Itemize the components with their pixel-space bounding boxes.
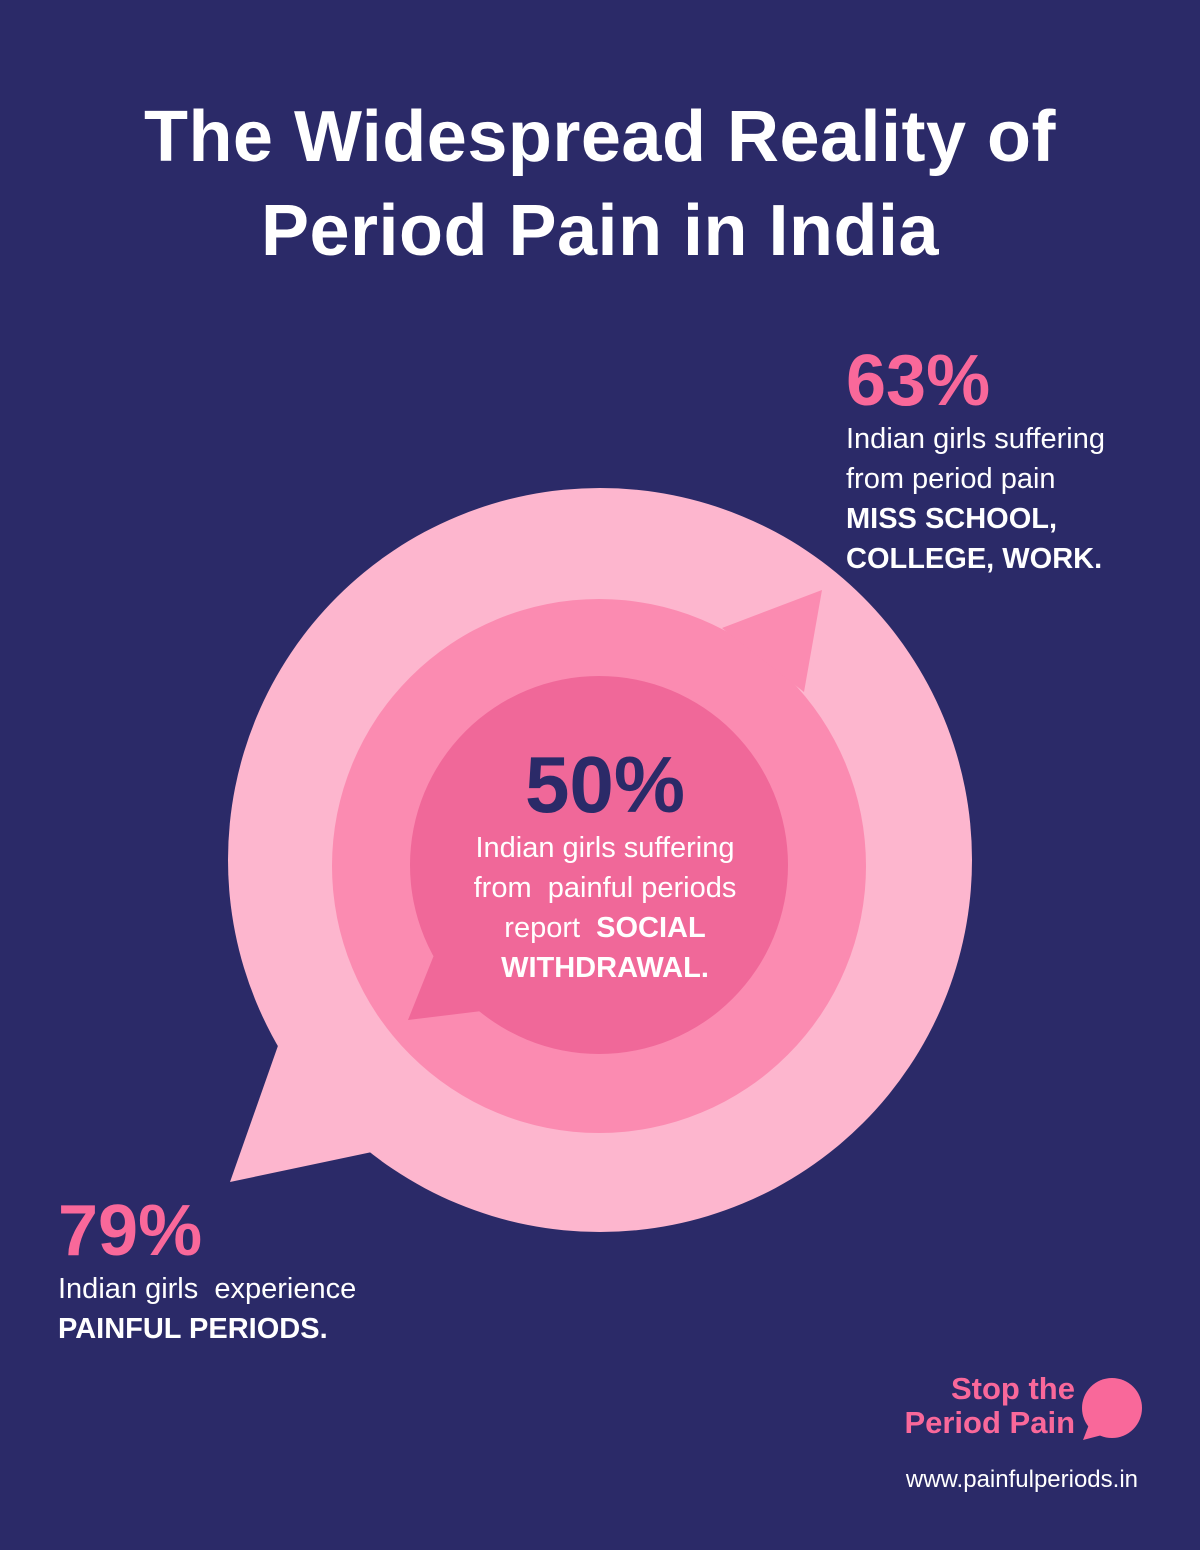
logo: Period Pain	[904, 1405, 1075, 1440]
title: The Widespread Reality of	[144, 97, 1056, 177]
center stat: from painful periods	[474, 872, 736, 904]
stat 79%	[58, 1191, 356, 1345]
middle bubble	[332, 590, 866, 1133]
icon: speech bubble	[1082, 1378, 1142, 1440]
logo: Stop the	[951, 1371, 1075, 1406]
center stat: 50%	[525, 740, 685, 829]
stat 79%: Indian girls experience	[58, 1273, 356, 1305]
title: Period Pain in India	[261, 191, 939, 271]
stat 79%: 79%	[58, 1191, 202, 1271]
stat 63%: MISS SCHOOL,	[846, 503, 1057, 535]
stat 63%: 63%	[846, 341, 990, 421]
stat 63%: COLLEGE, WORK.	[846, 543, 1102, 575]
stat 63%	[846, 341, 1105, 575]
center stat: report SOCIAL	[504, 912, 706, 944]
stat 63%: Indian girls suffering	[846, 423, 1105, 455]
center stat	[474, 740, 736, 984]
logo	[904, 1371, 1142, 1440]
stat 79%: PAINFUL PERIODS.	[58, 1313, 328, 1345]
center stat: WITHDRAWAL.	[501, 952, 709, 984]
title	[144, 97, 1056, 271]
stat 63%: from period pain	[846, 463, 1056, 495]
center stat: Indian girls suffering	[475, 832, 734, 864]
inner bubble	[408, 676, 788, 1054]
outer bubble	[228, 488, 972, 1232]
website: www.painfulperiods.in	[906, 1466, 1138, 1493]
